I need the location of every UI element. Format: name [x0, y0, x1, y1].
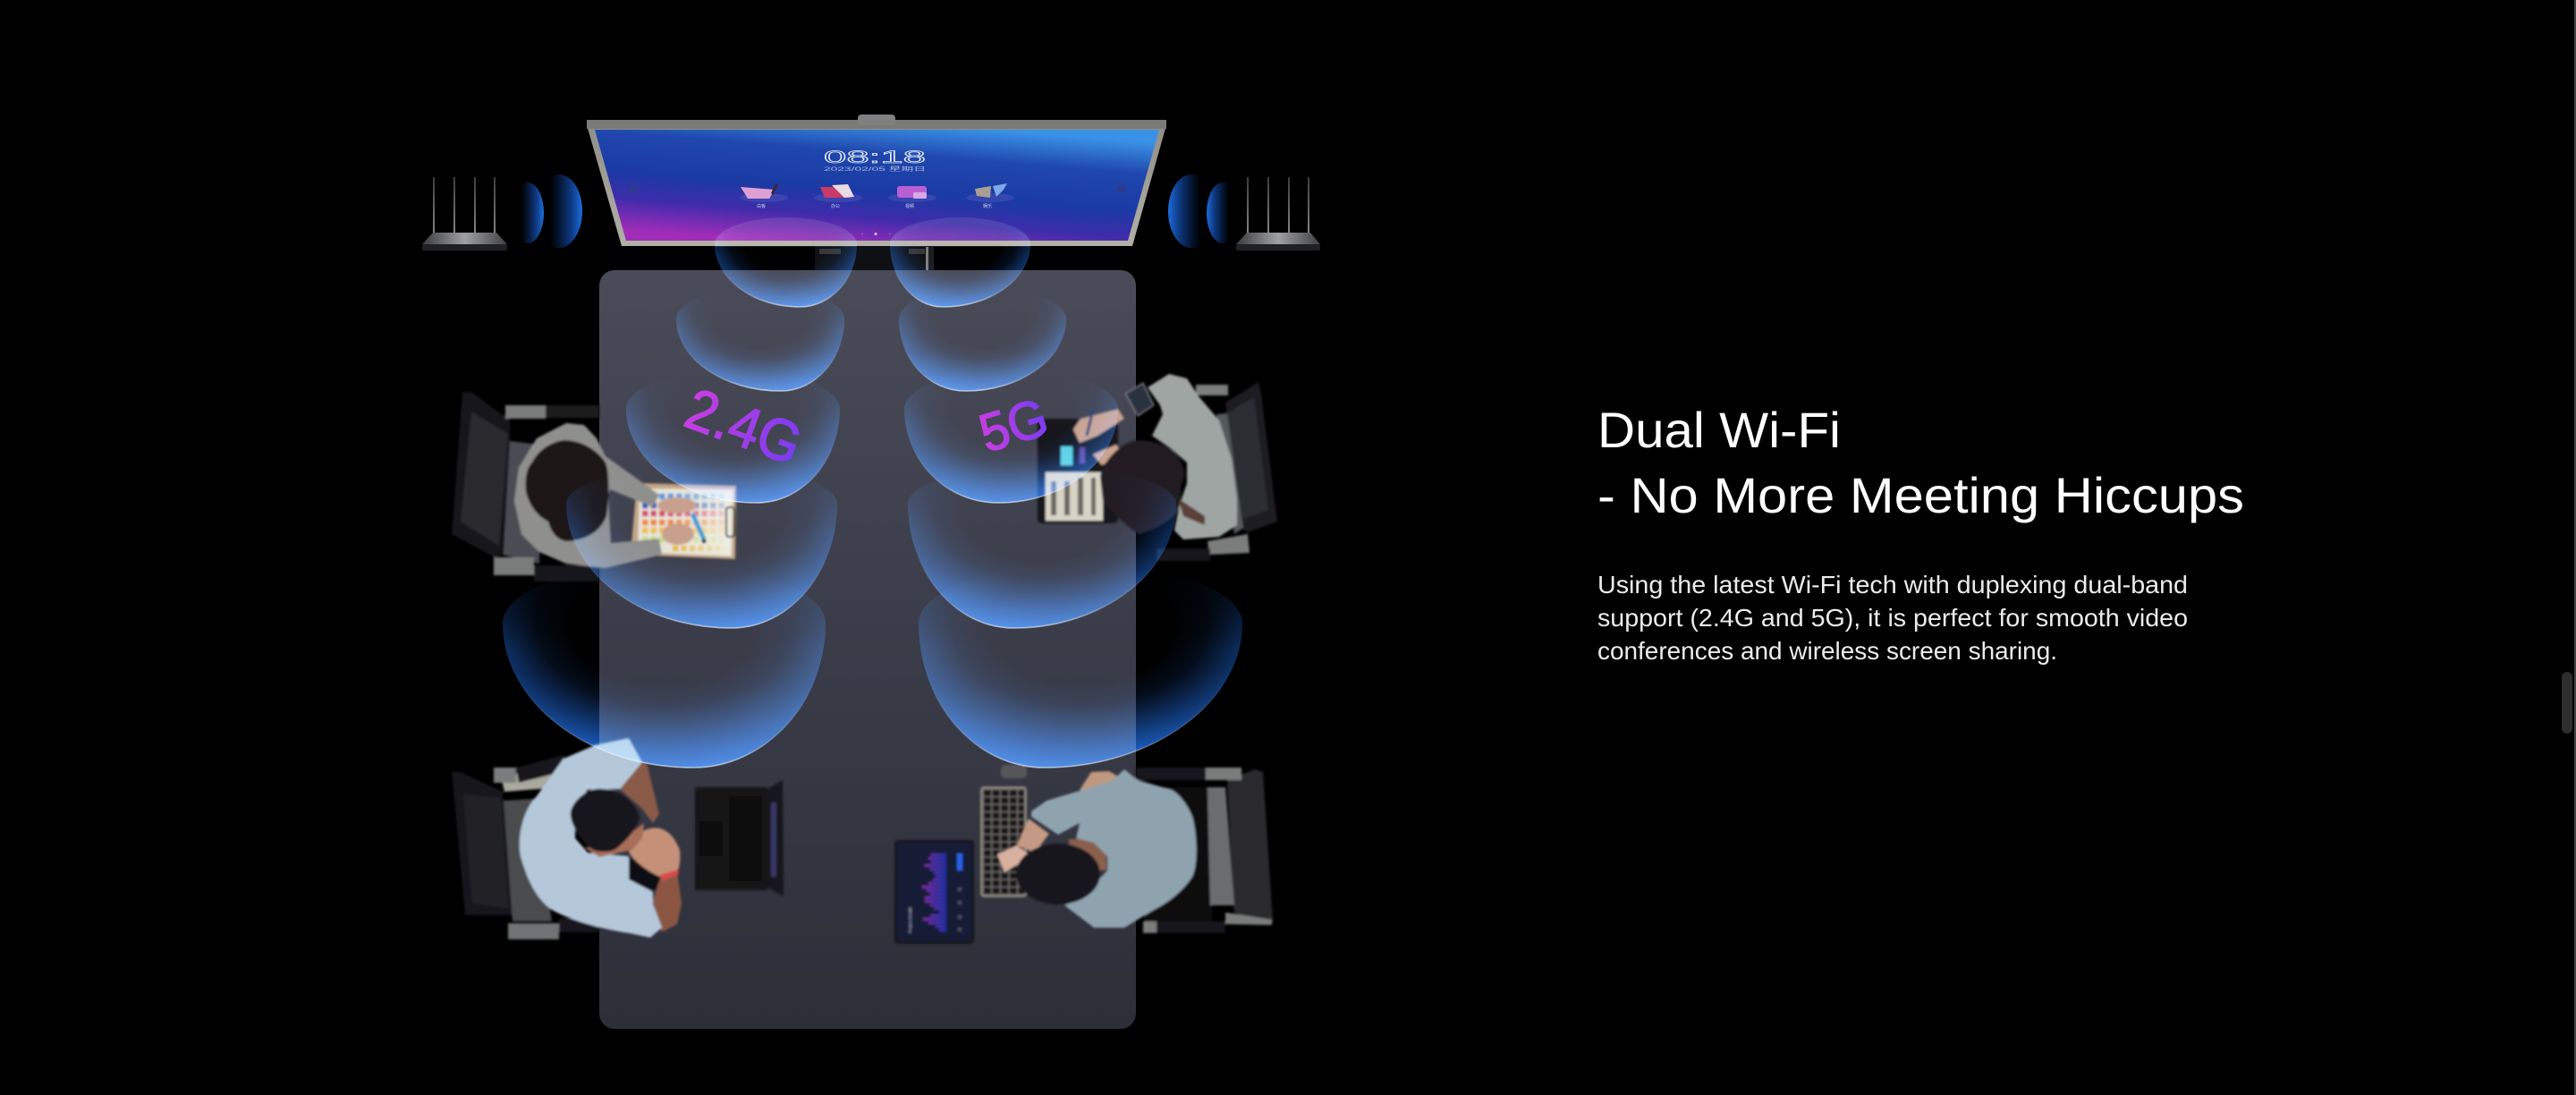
hands [629, 828, 680, 877]
upper arm [620, 763, 659, 823]
person: woman top right with tablet [1038, 374, 1277, 561]
chair [1157, 382, 1277, 561]
tablet vertical caption: Project Details [908, 906, 912, 933]
laptop [695, 780, 784, 896]
tablet chart bars [922, 853, 946, 931]
right router signal arcs [1168, 174, 1239, 248]
mouse [1001, 765, 1027, 778]
body text: support (2.4G and 5G), it is perfect for smooth video [1597, 604, 2188, 632]
screen clock: 08:18 [824, 149, 926, 167]
heading [1597, 402, 2244, 523]
body text: Using the latest Wi-Fi tech with duplexing dual-band [1597, 571, 2188, 598]
wifi waves: 2.4G column [503, 217, 857, 768]
tablet side icons [958, 887, 962, 931]
tablet [1038, 419, 1118, 523]
sweater torso [514, 423, 662, 568]
screen page arrows [629, 184, 1126, 193]
display screen [595, 130, 1159, 241]
tablet blue bar [957, 853, 962, 870]
right router [1236, 177, 1320, 250]
neck [1069, 839, 1106, 870]
shirt [1031, 769, 1197, 928]
left router signal arcs [512, 174, 582, 248]
wifi waves: 5G column [890, 217, 1242, 768]
hands and pen [657, 497, 707, 545]
forearm [653, 870, 682, 932]
screen page dots [861, 233, 891, 235]
person: man bottom right with keyboard and tablet [894, 765, 1273, 944]
plaid cuff [1125, 383, 1154, 416]
screen app labels: 办公 [831, 203, 840, 209]
wristband [660, 870, 679, 881]
meeting table [599, 270, 1136, 1029]
left router [422, 177, 507, 250]
hair [1016, 844, 1100, 904]
label: 2.4G: 2.4G [677, 376, 810, 477]
monitor stand [815, 245, 934, 270]
screen date: 2023/02/05 星期日 [824, 166, 926, 173]
screen app labels: 白板 [757, 203, 766, 209]
hair [525, 440, 608, 541]
screen app labels: 视频 [905, 203, 914, 209]
clipboard [631, 483, 736, 559]
shirt [520, 738, 662, 938]
face [584, 823, 644, 857]
screen app labels [757, 203, 992, 209]
sweater torso [1148, 374, 1237, 539]
screen app icons [740, 183, 1014, 202]
chair [452, 755, 599, 939]
window right edge [2574, 0, 2576, 1095]
display frame [587, 125, 1166, 246]
upper hand [1080, 771, 1124, 792]
heading: - No More Meeting Hiccups [1597, 467, 2244, 523]
top bar [587, 120, 1166, 129]
forearm and hand [1073, 409, 1124, 465]
scrollbar thumb [2562, 672, 2572, 734]
tablet [894, 840, 974, 944]
hair [571, 789, 640, 852]
screen app labels: 娱乐 [983, 203, 992, 209]
person: woman top left with chair and colour chart [452, 392, 736, 581]
heading: Dual Wi-Fi [1597, 402, 1841, 458]
person: man bottom left with laptop [452, 738, 784, 939]
chair [452, 392, 599, 581]
forearm and hand [997, 819, 1049, 872]
ponytail [1178, 498, 1205, 525]
lap shadow [629, 859, 660, 890]
keyboard [981, 787, 1026, 896]
label: 5G: 5G [972, 386, 1055, 463]
webcam [858, 115, 895, 125]
hair [1100, 440, 1184, 534]
body text: conferences and wireless screen sharing. [1597, 637, 2057, 665]
body text [1597, 571, 2188, 665]
interactive display [587, 115, 1166, 246]
chair [1136, 768, 1273, 933]
